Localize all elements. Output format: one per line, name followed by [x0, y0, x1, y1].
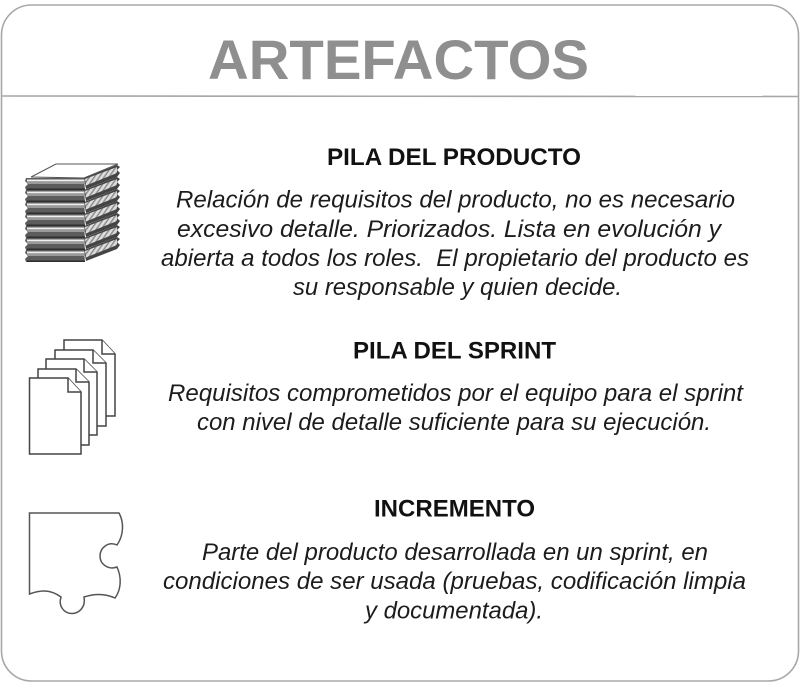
text block: incremento	[163, 539, 746, 624]
text block: incremento: condiciones de ser usada (pruebas, codificación limpia	[163, 568, 746, 595]
text block: pila del producto: Relación de requisitos del producto, no es necesario	[176, 186, 735, 214]
icon: stacked pile of sheets	[25, 164, 120, 262]
heading: pila del producto: PILA DEL PRODUCTO	[327, 144, 581, 171]
text block: pila del sprint: con nivel de detalle suficiente para su ejecución.	[197, 409, 711, 436]
title: ARTEFACTOS	[208, 28, 589, 91]
text block: incremento: y documentada).	[363, 598, 543, 624]
icon: puzzle piece	[30, 513, 123, 614]
panel: pila del sprint	[168, 338, 744, 436]
panel: incremento	[163, 496, 746, 624]
heading: pila del sprint: PILA DEL SPRINT	[353, 338, 556, 364]
text block: pila del producto: su responsable y quien decide.	[293, 274, 622, 301]
text block: pila del sprint: Requisitos comprometidos por el equipo para el sprint	[168, 380, 744, 407]
text block: pila del producto	[161, 186, 749, 301]
text block: pila del producto: excesivo detalle. Priorizados. Lista en evolución y	[177, 216, 723, 243]
icon: overlapping documents	[30, 340, 115, 454]
text block: incremento: Parte del producto desarrollada en un sprint, en	[202, 539, 708, 566]
text block: pila del producto: abierta a todos los roles. El propietario del producto es	[161, 245, 749, 272]
heading: incremento: INCREMENTO	[374, 496, 535, 522]
panel: pila del producto	[161, 144, 749, 301]
text block: pila del sprint	[168, 380, 744, 436]
